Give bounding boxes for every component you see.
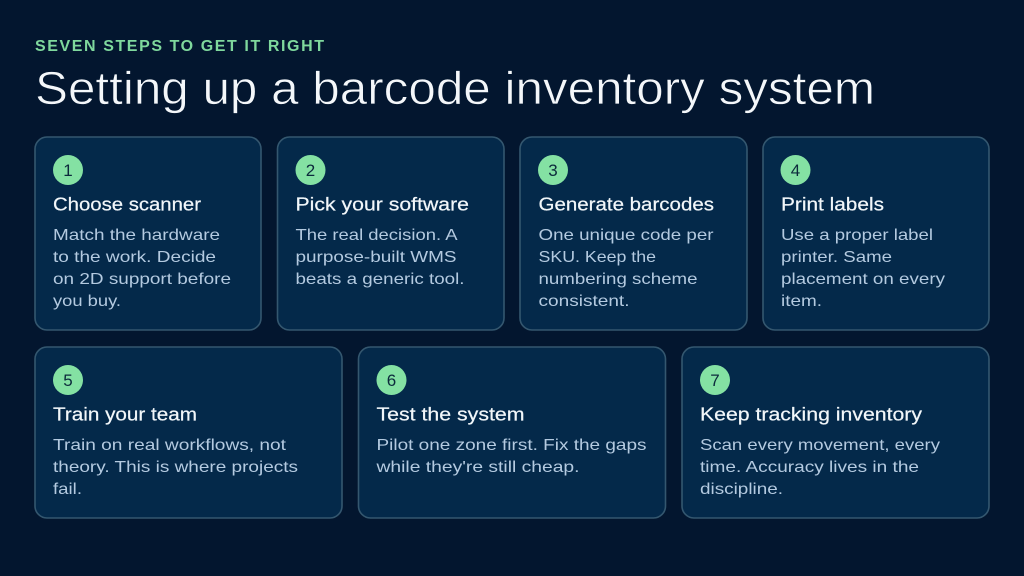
text: step 3 body: SKU. Keep the <box>538 249 656 266</box>
text: step 7 body <box>700 437 940 498</box>
text: step 4 body: printer. Same <box>781 249 892 266</box>
eyebrow: SEVEN STEPS TO GET IT RIGHT <box>35 38 324 55</box>
heading: print labels: Print labels <box>781 194 884 214</box>
text: step 4 body <box>781 227 945 310</box>
text: step 5 body: theory. This is where projects <box>53 459 298 476</box>
icon: number 3 <box>538 155 568 185</box>
panel: step 7 <box>682 347 989 518</box>
panel: step 2 <box>278 137 504 330</box>
text: step 6 body: Pilot one zone first. Fix the gaps <box>376 437 646 454</box>
text: step 2 body: beats a generic tool. <box>296 271 464 288</box>
icon: number 4: 4 <box>791 161 800 180</box>
heading: choose scanner: Choose scanner <box>53 194 201 214</box>
icon: number 2 <box>296 155 326 185</box>
icon: number 6 <box>376 365 406 395</box>
icon: number 5: 5 <box>63 371 73 390</box>
text: step 4 body: Use a proper label <box>781 227 933 244</box>
title: Setting up a barcode inventory system <box>35 62 875 114</box>
text: step 6 body <box>375 437 646 476</box>
text: step 3 body: numbering scheme <box>538 271 698 288</box>
text: step 2 body: purpose-built WMS <box>296 249 456 266</box>
icon: number 2: 2 <box>306 161 315 180</box>
icon: number 3: 3 <box>548 161 558 180</box>
text: step 5 body: Train on real workflows, not <box>53 437 287 454</box>
text: step 1 body: you buy. <box>53 293 121 310</box>
text: step 7 body: Scan every movement, every <box>700 437 940 454</box>
panel: step 4 <box>763 137 989 330</box>
icon: number 7 <box>700 365 730 395</box>
text: step 5 body: fail. <box>53 481 82 498</box>
icon: number 6: 6 <box>387 371 396 390</box>
heading: keep tracking inventory: Keep tracking inventory <box>700 404 922 424</box>
text: step 4 body: item. <box>781 293 822 310</box>
panel: step 1 <box>35 137 261 330</box>
heading: test the system: Test the system <box>376 404 524 424</box>
text: step 3 body: consistent. <box>538 293 630 310</box>
heading: generate barcodes: Generate barcodes <box>538 194 714 214</box>
text: step 3 body: One unique code per <box>538 227 714 244</box>
icon: number 5 <box>53 365 83 395</box>
text: step 7 body: time. Accuracy lives in the <box>700 459 919 476</box>
heading: pick your software: Pick your software <box>296 194 469 214</box>
icon: number 1: 1 <box>63 161 73 180</box>
text: step 1 body: Match the hardware <box>53 227 220 244</box>
icon: number 1 <box>53 155 83 185</box>
text: step 5 body <box>53 437 298 498</box>
icon: number 7: 7 <box>710 371 720 390</box>
panel: step 5 <box>35 347 342 518</box>
text: step 6 body: while they're still cheap. <box>375 459 580 476</box>
text: step 1 body: to the work. Decide <box>53 249 216 266</box>
text: step 1 body <box>53 227 231 310</box>
text: step 2 body: The real decision. A <box>296 227 458 244</box>
text: step 7 body: discipline. <box>700 481 783 498</box>
text: step 1 body: on 2D support before <box>53 271 231 288</box>
text: step 2 body <box>296 227 464 288</box>
heading: train your team: Train your team <box>53 404 197 424</box>
panel: step 3 <box>520 137 747 330</box>
icon: number 4 <box>780 155 810 185</box>
text: step 4 body: placement on every <box>781 271 945 288</box>
text: step 3 body <box>538 227 714 310</box>
panel: step 6 <box>358 347 666 518</box>
